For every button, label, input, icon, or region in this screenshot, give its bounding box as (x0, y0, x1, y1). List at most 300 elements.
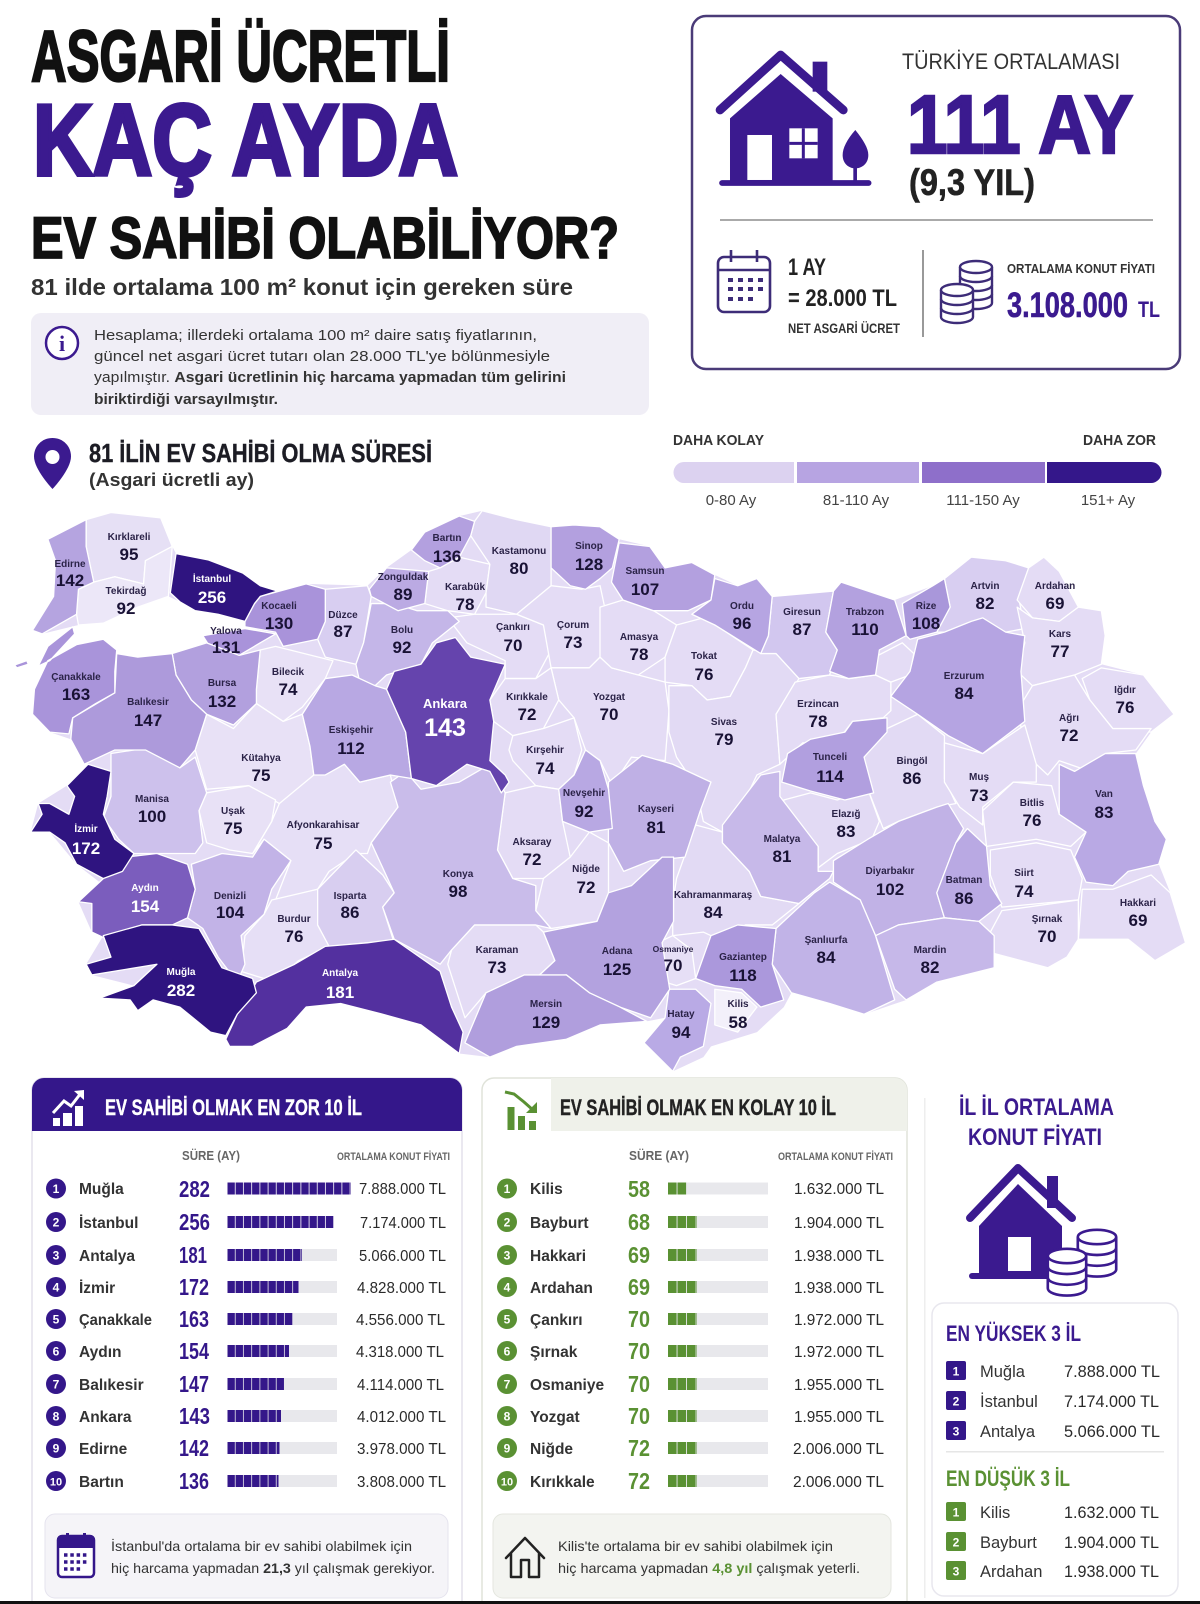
callout: Kilis: Kilis'te ortalama bir ev sahibi olabilmek için (558, 1538, 833, 1554)
row: Aydın: 6 (53, 1344, 60, 1358)
column headers: ORTALAMA KONUT FİYATI (778, 1150, 893, 1163)
label: Erzurum: Erzurum (944, 671, 984, 682)
big number: 111 AY (907, 78, 1133, 171)
province: Van (1059, 754, 1166, 886)
label: Siirt: 74 (1015, 882, 1034, 901)
row: Niğde: 2.006.000 TL (793, 1441, 884, 1458)
label: Tunceli: Tunceli (813, 752, 847, 763)
province: Adana (536, 857, 674, 1018)
label: Burdur: 76 (285, 927, 303, 946)
label: Trabzon: Trabzon (846, 607, 884, 618)
label: Denizli: Denizli (214, 891, 246, 902)
label: Düzce: Düzce (328, 610, 358, 621)
province: Tokat (665, 618, 753, 700)
row: Niğde: 9 (504, 1442, 511, 1456)
row: İstanbul: İstanbul (79, 1215, 138, 1232)
province: Ağrı (1017, 675, 1151, 775)
label: Kırklareli: Kırklareli (108, 532, 150, 543)
province: Uşak (199, 786, 276, 854)
label: Yozgat: Yozgat (593, 692, 625, 703)
row: Balıkesir (46, 1371, 444, 1397)
lowest three (946, 1466, 1159, 1581)
province: Şırnak (987, 900, 1078, 968)
legend: 111-150 Ay (946, 492, 1020, 509)
province: Bingöl (864, 714, 956, 829)
label: Bolu: 92 (393, 638, 411, 657)
icon: falling chart (505, 1092, 537, 1130)
label: Ordu: Ordu (730, 601, 754, 612)
row: Ankara: 8 (53, 1410, 60, 1424)
lowest three: 3 (953, 1564, 960, 1578)
label: Eskişehir: Eskişehir (329, 725, 373, 736)
province: Mardin (876, 918, 994, 1000)
row: İstanbul (46, 1209, 446, 1235)
province: Trabzon (826, 582, 906, 679)
lowest three: 1.938.000 TL (1064, 1563, 1159, 1581)
label: İzmir: İzmir (74, 824, 98, 835)
note text: Hesaplama; illerdeki ortalama 100 m² daire satış fiyatlarının, (94, 328, 537, 344)
row: Ardahan (497, 1274, 884, 1300)
row: Edirne: 3.978.000 TL (357, 1441, 446, 1458)
label: Denizli: 104 (216, 903, 245, 922)
label: Sivas: 79 (715, 730, 733, 749)
label: Trabzon: 110 (851, 620, 879, 639)
highest three: 2 (953, 1394, 960, 1408)
label: Nevşehir: Nevşehir (563, 788, 605, 799)
label: Samsun: 107 (631, 580, 659, 599)
label: Çankırı: Çankırı (496, 622, 530, 633)
label: Bitlis: Bitlis (1020, 798, 1044, 809)
row: Ankara: 4.012.000 TL (357, 1409, 446, 1426)
title (31, 17, 619, 271)
label: Manisa: 100 (138, 807, 166, 826)
label: Mardin: 82 (921, 958, 939, 977)
province: Afyonkarahisar (253, 764, 398, 900)
monthly wage (788, 254, 901, 336)
label: Gaziantep: 118 (729, 966, 757, 985)
row: Muğla: Muğla (79, 1181, 124, 1198)
label: Malatya: 81 (773, 847, 791, 866)
panel header (32, 1078, 462, 1131)
label: Niğde: Niğde (572, 864, 600, 875)
label: Kırşehir: Kırşehir (526, 745, 564, 756)
row: Aydın: Aydın (79, 1344, 121, 1361)
icon: house with tree (720, 55, 869, 183)
row: Hakkari: 69 (628, 1242, 650, 1268)
row: Aydın: 154 (179, 1338, 209, 1364)
row: Bartın (46, 1468, 446, 1494)
label: Mardin: Mardin (914, 945, 946, 956)
lowest three: 1 (953, 1506, 960, 1520)
label: Iğdır: Iğdır (1114, 685, 1136, 696)
row: İstanbul: 2 (53, 1216, 60, 1230)
row: Kilis: 1 (504, 1182, 511, 1196)
legend: DAHA KOLAY (673, 432, 764, 449)
province: Elazığ (784, 789, 879, 868)
highest three: Antalya (980, 1423, 1036, 1441)
province: Muş (944, 725, 1036, 825)
panel: calculation note (31, 313, 649, 415)
label: Malatya: Malatya (764, 834, 800, 845)
label: Kayseri: Kayseri (638, 804, 674, 815)
label: Giresun: Giresun (783, 607, 821, 618)
row: Edirne (46, 1435, 446, 1461)
panel: hardest 10 provinces (32, 1078, 462, 1604)
map labels: province names and months (51, 532, 1156, 1042)
column headers: SÜRE (AY) (182, 1148, 240, 1163)
row: Bayburt: 1.904.000 TL (794, 1215, 884, 1232)
label: Niğde: 72 (577, 878, 595, 897)
province: Eskişehir (302, 675, 411, 782)
row: Hakkari: Hakkari (530, 1248, 586, 1265)
province: Diyarbakır (833, 804, 964, 936)
province: Yalova (203, 629, 276, 655)
highest three: 7.174.000 TL (1064, 1393, 1159, 1411)
map of Turkey: provinces (15, 511, 1186, 1071)
row: İzmir: 172 (179, 1274, 209, 1300)
label: Çanakkale: 163 (62, 685, 90, 704)
legend (673, 432, 1162, 509)
row: Balıkesir: 4.114.000 TL (357, 1377, 444, 1394)
label: Bingöl: 86 (903, 769, 921, 788)
label: Ağrı: 72 (1060, 726, 1078, 745)
row: Ankara (46, 1403, 446, 1429)
province: Sinop (551, 525, 619, 589)
label: Şanlıurfa: 84 (817, 948, 836, 967)
average price: TL (1138, 297, 1160, 322)
province: Bolu (356, 604, 459, 686)
label: Yozgat: 70 (600, 705, 618, 724)
row: Şırnak: 1.972.000 TL (794, 1344, 884, 1361)
province: Artvin (937, 557, 1029, 632)
label: Karabük: 78 (456, 595, 474, 614)
label: Antalya: 181 (326, 983, 354, 1002)
label: Rize: 108 (912, 614, 940, 633)
column headers (182, 1148, 450, 1163)
panel header: EV SAHİBİ OLMAK EN KOLAY 10 İL (560, 1095, 836, 1120)
label: Şırnak: 70 (1038, 927, 1056, 946)
icon: coins (941, 261, 992, 323)
province: Kastamonu (471, 511, 551, 614)
row: Yozgat: Yozgat (530, 1409, 580, 1426)
row: Yozgat (497, 1403, 884, 1429)
panel header: EV SAHİBİ OLMAK EN ZOR 10 İL (105, 1095, 362, 1120)
province: Burdur (241, 889, 329, 982)
label: Karaman: Karaman (476, 945, 518, 956)
row: Osmaniye: 70 (628, 1371, 650, 1397)
row: Bartın: 10 (50, 1476, 62, 1488)
label: Aksaray: Aksaray (513, 837, 551, 848)
label: Bolu: Bolu (391, 625, 413, 636)
row: Kilis: 58 (628, 1176, 650, 1202)
province: Kırklareli (86, 512, 172, 584)
lowest three: Bayburt (980, 1534, 1037, 1552)
average price: ORTALAMA KONUT FİYATI (1007, 261, 1155, 276)
province: İstanbul (170, 554, 277, 621)
province: Bilecik (256, 646, 333, 721)
map heading: 81 İLİN EV SAHİBİ OLMA SÜRESİ (89, 438, 432, 468)
row: Çanakkale: 163 (179, 1306, 209, 1332)
row: Edirne: Edirne (79, 1441, 128, 1458)
row: Kilis: 1.632.000 TL (794, 1181, 884, 1198)
label: Eskişehir: 112 (337, 739, 365, 758)
row: Çanakkale: Çanakkale (79, 1312, 152, 1329)
heading: İL İL ORTALAMA (959, 1094, 1114, 1121)
province: Kırıkkale (490, 668, 559, 736)
highest three: EN YÜKSEK 3 İL (946, 1321, 1081, 1346)
column headers: SÜRE (AY) (629, 1148, 689, 1163)
label: Hatay: Hatay (667, 1009, 695, 1020)
row: İstanbul: 256 (179, 1209, 210, 1235)
row: Kırıkkale: 72 (628, 1468, 650, 1494)
label: Afyonkarahisar: Afyonkarahisar (287, 820, 359, 831)
province: Rize (902, 579, 950, 639)
row: Antalya (46, 1242, 446, 1268)
label: Kars: 77 (1051, 642, 1069, 661)
average price: 3.108.000 (1007, 286, 1128, 325)
province: Bitlis (983, 782, 1086, 846)
province: Bartın (411, 516, 475, 568)
row: Antalya: 5.066.000 TL (359, 1248, 446, 1265)
row: Ardahan: 1.938.000 TL (794, 1280, 884, 1297)
map heading: (Asgari ücretli ay) (89, 470, 254, 490)
province: Hatay (644, 989, 711, 1071)
legend: 81-110 Ay (823, 492, 890, 509)
province: Ordu (692, 579, 772, 654)
row: İzmir: İzmir (79, 1280, 115, 1297)
label: Amasya: Amasya (620, 632, 658, 643)
label: Çorum: 73 (564, 633, 582, 652)
province: İzmir (31, 764, 134, 879)
row: Şırnak: 70 (628, 1338, 650, 1364)
label: İzmir: 172 (72, 839, 100, 858)
province: Kilis (715, 989, 757, 1032)
row: Ardahan: 4 (504, 1280, 511, 1294)
row: Ankara: Ankara (79, 1409, 132, 1426)
province: Tekirdağ (77, 546, 172, 625)
label: Diyarbakır: Diyarbakır (866, 866, 914, 877)
callout: Kilis: hiç harcama yapmadan 4,8 yıl çalışmak yeterli. (558, 1560, 860, 1576)
row: Edirne: 9 (53, 1442, 60, 1456)
label: Bursa: 132 (208, 692, 236, 711)
label: Kütahya: Kütahya (241, 753, 281, 764)
label: Ordu: 96 (733, 614, 751, 633)
highest three: 3 (953, 1424, 960, 1438)
label: Adana: Adana (602, 946, 632, 957)
row: Antalya: Antalya (79, 1248, 135, 1265)
callout: İstanbul (45, 1514, 448, 1598)
heading (959, 1094, 1114, 1151)
panel: average house price by province (924, 1094, 1178, 1598)
label: Türkiye ortalaması: TÜRKİYE ORTALAMASI (902, 49, 1120, 74)
province: Edirne (33, 520, 94, 634)
province: Kahramanmaraş (673, 825, 799, 939)
label: Kastamonu: 80 (510, 559, 528, 578)
row: Şırnak: Şırnak (530, 1344, 578, 1361)
label: Zonguldak: 89 (394, 585, 412, 604)
title: ASGARİ ÜCRETLİ (31, 17, 450, 97)
monthly wage: NET ASGARİ ÜCRET (788, 321, 901, 336)
province: Amasya (600, 600, 677, 675)
column headers (629, 1148, 893, 1163)
label: Tekirdağ: 92 (117, 599, 135, 618)
row: İzmir (46, 1274, 446, 1300)
callout: Kilis (493, 1514, 891, 1598)
row: Bayburt: 68 (628, 1209, 650, 1235)
row: Aydın: 4.318.000 TL (356, 1344, 444, 1361)
province: Iğdır (1082, 668, 1174, 732)
label: Konya: Konya (443, 869, 473, 880)
highest three: 5.066.000 TL (1064, 1423, 1160, 1441)
label: Konya: 98 (449, 882, 467, 901)
icon: rising chart (53, 1090, 84, 1126)
province: Giresun (761, 591, 837, 679)
label: Kırşehir: 74 (536, 759, 555, 778)
province: Kocaeli (245, 584, 325, 646)
row: Kırıkkale: 2.006.000 TL (793, 1474, 884, 1491)
row: Yozgat: 70 (628, 1403, 650, 1429)
row: Aydın (46, 1338, 444, 1364)
label: Osmaniye: 70 (664, 956, 682, 975)
label: Van: Van (1095, 789, 1113, 800)
province: Ankara (387, 637, 509, 793)
highest three: 7.888.000 TL (1064, 1363, 1160, 1381)
title: KAÇ AYDA (33, 85, 458, 197)
province: Aydın (78, 854, 195, 939)
icon: calendar (58, 1533, 94, 1577)
row: Osmaniye (497, 1371, 884, 1397)
row: Niğde: Niğde (530, 1441, 573, 1458)
label: İstanbul: İstanbul (193, 574, 231, 585)
province: Çanakkale (15, 627, 117, 734)
label: Çanakkale: Çanakkale (51, 672, 101, 683)
label: Amasya: 78 (630, 645, 648, 664)
label: Elazığ: Elazığ (832, 809, 860, 820)
row: Osmaniye: Osmaniye (530, 1377, 604, 1394)
label: Rize: Rize (916, 601, 936, 612)
panel: Türkiye average (692, 16, 1180, 369)
legend: 151+ Ay (1081, 492, 1136, 509)
label: Kilis: 58 (729, 1013, 747, 1032)
province: Hakkari (1078, 875, 1186, 961)
row: Ankara: 143 (179, 1403, 210, 1429)
province: Ardahan (1017, 557, 1078, 621)
province: Bursa (172, 643, 260, 725)
label: Iğdır: 76 (1116, 698, 1134, 717)
row: Ardahan: Ardahan (530, 1280, 593, 1297)
label: Osmaniye: Osmaniye (653, 944, 693, 954)
label: Diyarbakır: 102 (876, 880, 904, 899)
label: Bartın: Bartın (433, 533, 461, 544)
label: Hakkari: Hakkari (1120, 898, 1156, 909)
label: Ardahan: 69 (1046, 594, 1064, 613)
label: Antalya: Antalya (322, 968, 358, 979)
row: Kırıkkale: 10 (501, 1476, 513, 1488)
label: Kırklareli: 95 (120, 545, 138, 564)
label: Artvin: Artvin (971, 581, 999, 592)
row: Niğde (497, 1435, 884, 1461)
row: Bayburt: 2 (504, 1216, 511, 1230)
label: Uşak: Uşak (221, 806, 245, 817)
label: Sinop: Sinop (575, 541, 603, 552)
title: EV SAHİBİ OLABİLİYOR? (31, 206, 619, 271)
label: Kahramanmaraş: 84 (704, 903, 723, 922)
label: Edirne: Edirne (54, 559, 86, 570)
province: Nevşehir (559, 750, 612, 832)
province: Kırşehir (509, 718, 582, 789)
label: Şanlıurfa: Şanlıurfa (805, 935, 847, 946)
province: Zonguldak (369, 568, 429, 611)
row: İstanbul: 7.174.000 TL (360, 1215, 446, 1232)
price box (932, 1303, 1178, 1596)
monthly wage: = 28.000 TL (788, 285, 897, 312)
province: Şanlıurfa (772, 882, 895, 1014)
highest three: Muğla (980, 1363, 1026, 1381)
province: Karabük (425, 557, 490, 614)
label: Tokat: Tokat (691, 651, 717, 662)
row: Yozgat: 8 (504, 1410, 511, 1424)
province: Manisa (103, 746, 207, 854)
province: Osmaniye (650, 936, 696, 986)
label: Hakkari: 69 (1129, 911, 1147, 930)
label: Samsun: Samsun (626, 566, 664, 577)
label: Zonguldak: Zonguldak (378, 572, 428, 583)
label: Düzce: 87 (334, 622, 352, 641)
label: Kırıkkale: 72 (518, 705, 536, 724)
label: Kastamonu: Kastamonu (492, 546, 546, 557)
province: Gaziantep (696, 925, 784, 1007)
province: Isparta (318, 850, 394, 946)
note text (94, 328, 566, 408)
row: Bartın: 3.808.000 TL (357, 1474, 446, 1491)
row: Hakkari: 3 (504, 1248, 511, 1262)
row: Yozgat: 1.955.000 TL (794, 1409, 884, 1426)
row: Bartın: 136 (179, 1468, 209, 1494)
icon: info (46, 327, 78, 359)
row: Edirne: 142 (179, 1435, 209, 1461)
label: Burdur: Burdur (277, 914, 311, 925)
legend: 0-80 Ay (706, 492, 757, 509)
province: Aksaray (498, 786, 570, 879)
label: Hatay: 94 (672, 1023, 691, 1042)
label: Çorum: Çorum (557, 620, 589, 631)
label: Kocaeli: 130 (265, 614, 293, 633)
province: Muğla (86, 925, 256, 1036)
province: Samsun (611, 543, 715, 611)
lowest three: 1.632.000 TL (1064, 1504, 1159, 1522)
row: Kilis (497, 1176, 884, 1202)
label: Bingöl: Bingöl (896, 756, 928, 767)
label: Karabük: Karabük (445, 582, 485, 593)
label: Isparta: 86 (341, 903, 359, 922)
row: Muğla: 282 (179, 1176, 210, 1202)
province: Mersin (465, 975, 647, 1057)
label: Gaziantep: Gaziantep (719, 952, 767, 963)
label: Tunceli: 114 (816, 767, 844, 786)
row: Çanakkale: 5 (53, 1312, 60, 1326)
heading: KONUT FİYATI (968, 1124, 1102, 1151)
province: Kütahya (195, 704, 314, 804)
label: Uşak: 75 (224, 819, 242, 838)
row: Bayburt (497, 1209, 884, 1235)
icon: map pin (34, 438, 71, 489)
panel header (505, 1078, 907, 1131)
label: Sivas: Sivas (711, 717, 737, 728)
row: Çankırı: 5 (504, 1312, 511, 1326)
map heading (34, 438, 432, 490)
monthly wage: 1 AY (788, 254, 826, 281)
province: Kayseri (608, 755, 711, 871)
